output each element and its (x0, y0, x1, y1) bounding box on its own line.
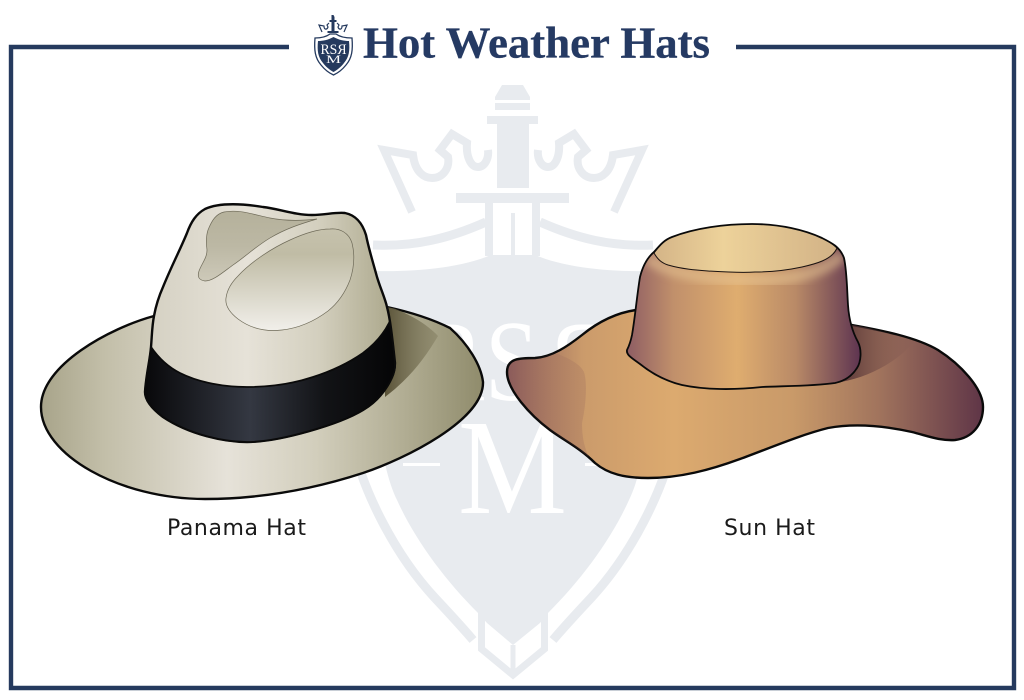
logo monogram: M (326, 52, 341, 66)
logo shield (315, 34, 352, 75)
label: sun hat: Sun Hat (724, 516, 815, 541)
sun hat brim left shading (540, 354, 588, 457)
watermark monogram letters: R (420, 298, 485, 426)
watermark monogram letters: M (458, 393, 567, 543)
illustration: panama hat (41, 204, 483, 499)
illustration: sun hat (500, 224, 983, 478)
panama dent right (226, 229, 354, 331)
logo crown (319, 23, 347, 32)
sun hat brim (507, 310, 983, 478)
logo crest (315, 15, 352, 75)
watermark arc bands (373, 222, 653, 245)
watermark shield outer border (352, 440, 674, 640)
sun hat crown highlight (648, 255, 842, 280)
sun hat brim shadow (842, 325, 908, 382)
watermark monogram letters: S (485, 298, 539, 426)
panama brim (41, 307, 483, 499)
label: panama hat: Panama Hat (167, 516, 306, 541)
watermark monogram letters: Я (548, 298, 612, 426)
watermark shield body (374, 255, 652, 645)
sun hat crown outline (627, 224, 861, 389)
panama dent left (198, 211, 317, 281)
watermark: shield crest (352, 85, 674, 675)
title: Hot Weather Hats (363, 18, 710, 68)
sun hat crown top (654, 224, 837, 272)
panama crown (145, 204, 395, 442)
watermark crown (384, 134, 642, 212)
logo monogram: RSЯ (320, 42, 346, 58)
watermark monogram letters (403, 298, 622, 543)
watermark shield point (482, 613, 544, 675)
watermark finial and sword (456, 85, 569, 256)
panama hat band (145, 323, 395, 442)
sun hat crown (627, 224, 861, 389)
logo monogram (320, 42, 346, 66)
panama brim shadow (385, 305, 438, 397)
